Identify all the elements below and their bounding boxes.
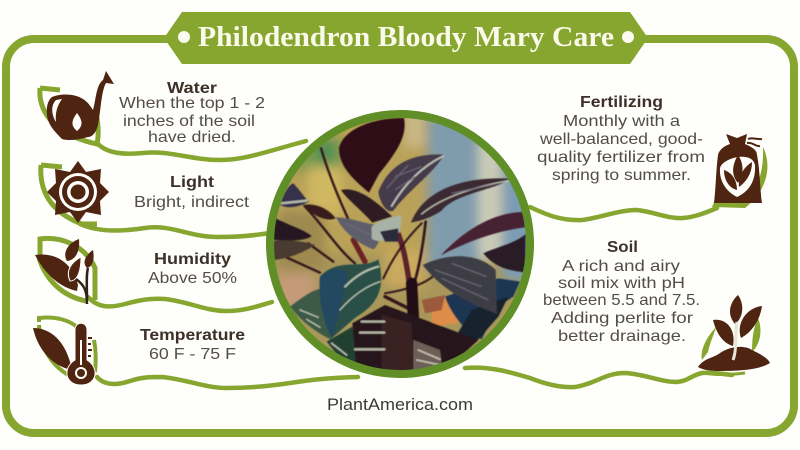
Temperature heading: Temperature <box>140 327 245 344</box>
icon: sun <box>41 161 109 224</box>
icon: leaves with drops <box>35 238 95 304</box>
Soil heading: Soil <box>607 239 638 256</box>
Soil text: Adding perlite for <box>551 310 694 327</box>
photo of the plant in a circle <box>266 110 534 378</box>
icon: fertilizer bag <box>712 134 767 208</box>
leaves and stems <box>274 118 526 372</box>
title: Philodendron Bloody Mary Care <box>198 21 614 53</box>
Temperature section <box>33 317 245 385</box>
Soil text: soil mix with pH <box>558 275 685 292</box>
Light section <box>41 161 250 224</box>
leaf shapes <box>339 118 405 193</box>
blurred background <box>278 118 526 306</box>
Fertilizing text: Monthly with a <box>563 113 680 130</box>
Water text: When the top 1 - 2 <box>119 95 265 112</box>
Temperature text: 60 F - 75 F <box>149 346 236 363</box>
icon: watering can <box>40 71 114 144</box>
Water section <box>40 71 265 146</box>
Fertilizing text: spring to summer. <box>552 167 691 184</box>
Fertilizing text: well-balanced, good- <box>539 131 703 148</box>
Humidity heading: Humidity <box>154 251 231 268</box>
Water text: have dried. <box>148 129 236 146</box>
Light text: Bright, indirect <box>134 194 250 211</box>
Fertilizing section <box>537 94 767 208</box>
Light heading: Light <box>170 174 215 191</box>
Soil text: between 5.5 and 7.5. <box>543 292 700 309</box>
leaf veins and highlights <box>282 156 508 365</box>
Water heading: Water <box>167 80 217 97</box>
Soil text: A rich and airy <box>562 258 680 275</box>
Humidity section <box>35 238 237 304</box>
wavy connector lines <box>80 141 732 388</box>
Water text: inches of the soil <box>123 113 255 130</box>
Fertilizing text: quality fertilizer from <box>537 149 705 166</box>
icon: leaf and thermometer <box>33 317 96 385</box>
stems <box>285 148 442 317</box>
title banner <box>164 12 648 64</box>
source credit: PlantAmerica.com <box>327 396 473 414</box>
icon: sprout in soil <box>698 295 770 374</box>
Humidity text: Above 50% <box>148 270 237 287</box>
Fertilizing heading: Fertilizing <box>580 94 663 111</box>
Soil text: better drainage. <box>558 328 686 345</box>
Soil section <box>543 239 770 374</box>
